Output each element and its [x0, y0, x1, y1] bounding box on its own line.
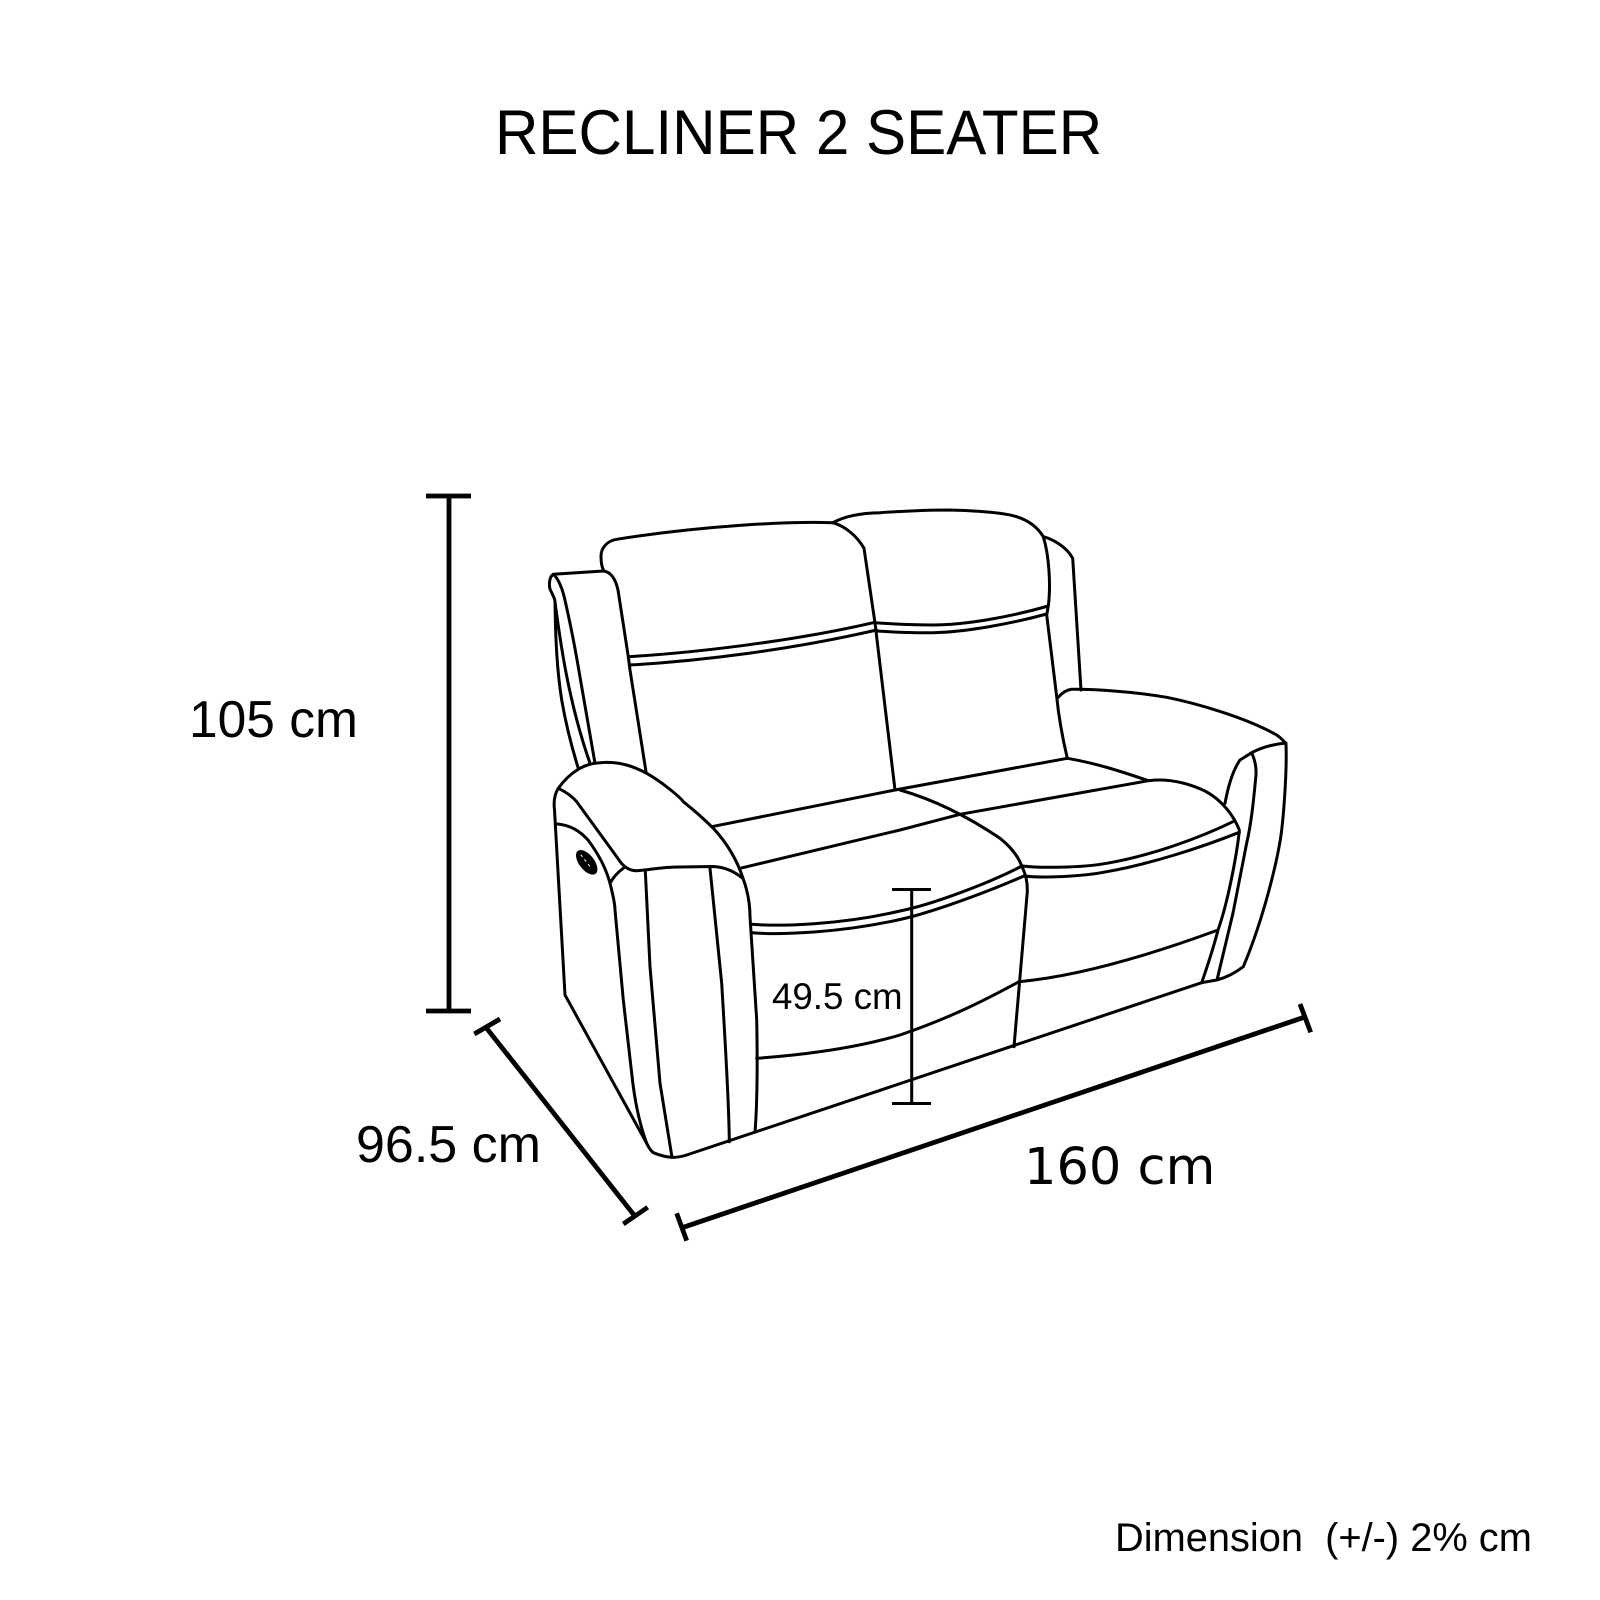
- right back wing: [1043, 537, 1081, 690]
- title: RECLINER 2 SEATER: [495, 98, 1102, 168]
- footnote: Dimension (+/-) 2% cm: [1115, 1516, 1532, 1560]
- left back wing: [549, 571, 646, 772]
- seat deck: [712, 758, 1148, 868]
- left arm side panel and strips: [557, 824, 729, 1157]
- right arm: [1058, 689, 1286, 983]
- left arm: [554, 762, 1202, 1157]
- dimension: height 105 cm: 105 cm: [189, 690, 358, 748]
- sofa line drawing: [549, 510, 1286, 1157]
- dimension: depth 96.5 cm: [356, 1019, 648, 1224]
- dimension: width 160 cm: [677, 1004, 1311, 1241]
- dimension: seat height 49.5 cm: 49.5 cm: [772, 976, 903, 1017]
- dimension: depth 96.5 cm: 96.5 cm: [356, 1116, 541, 1174]
- right seat cushion: [1019, 780, 1239, 982]
- dimension: height 105 cm: [189, 496, 471, 1011]
- dimension: width 160 cm: 160 cm: [1024, 1138, 1215, 1197]
- left seat cushion: [752, 790, 1027, 1058]
- icon: recliner control button: [572, 846, 602, 878]
- right back cushion: [833, 510, 1067, 758]
- dimension: seat height 49.5 cm: [772, 890, 931, 1104]
- left back cushion: [601, 522, 895, 790]
